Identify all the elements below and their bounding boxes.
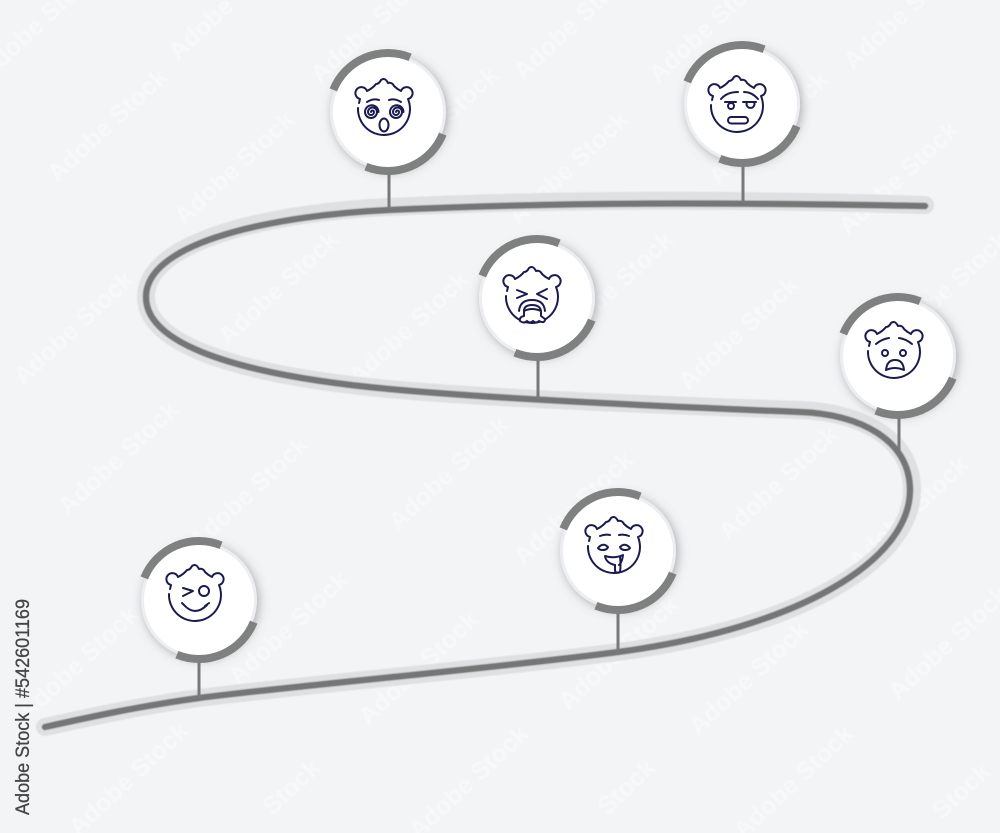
watermark: Adobe Stock: [183, 431, 314, 555]
watermark: Adobe Stock: [508, 446, 639, 570]
watermark: Adobe Stock: [383, 411, 514, 535]
watermark: Stock: [257, 754, 326, 821]
watermark: Adobe Stock: [373, 61, 504, 185]
milestone: dizzy face: [330, 53, 446, 210]
watermark: Adobe Stock: [169, 106, 300, 230]
side credit text: Adobe Stock | #542601169: [13, 599, 34, 815]
watermark: Adobe Stock: [42, 63, 173, 187]
watermark: Adobe Stock: [843, 451, 974, 575]
watermark: Adobe Stock: [353, 606, 484, 730]
milestone: vomiting face: [479, 239, 595, 400]
watermark: Adobe Stock: [553, 591, 684, 715]
watermark: Adobe Stock: [13, 601, 144, 725]
watermark: Adobe Stock: [673, 271, 804, 395]
watermark: Adobe Stock: [53, 396, 184, 520]
watermark: Adobe Stock: [213, 226, 344, 350]
milestone: winking face: [141, 541, 257, 698]
watermark: Adobe Stock: [223, 566, 354, 690]
watermark: Adobe Stock: [713, 421, 844, 545]
milestone: drooling face: [560, 492, 676, 652]
watermark: Adobe Stock: [8, 266, 139, 390]
watermark: Stock: [592, 754, 661, 821]
milestone: grimacing face: [684, 45, 800, 203]
watermark: Stock: [927, 758, 996, 825]
winding road line: [45, 201, 925, 727]
watermark: Adobe Stock: [703, 66, 834, 190]
watermark: Adobe Stock: [343, 266, 474, 390]
watermark: Adobe Stock: [683, 616, 814, 740]
watermark: Adobe Stock: [548, 226, 679, 350]
watermark: Adobe Stock: [503, 106, 634, 230]
milestone: worried face: [840, 297, 956, 450]
watermark: Adobe Stock: [833, 116, 964, 240]
